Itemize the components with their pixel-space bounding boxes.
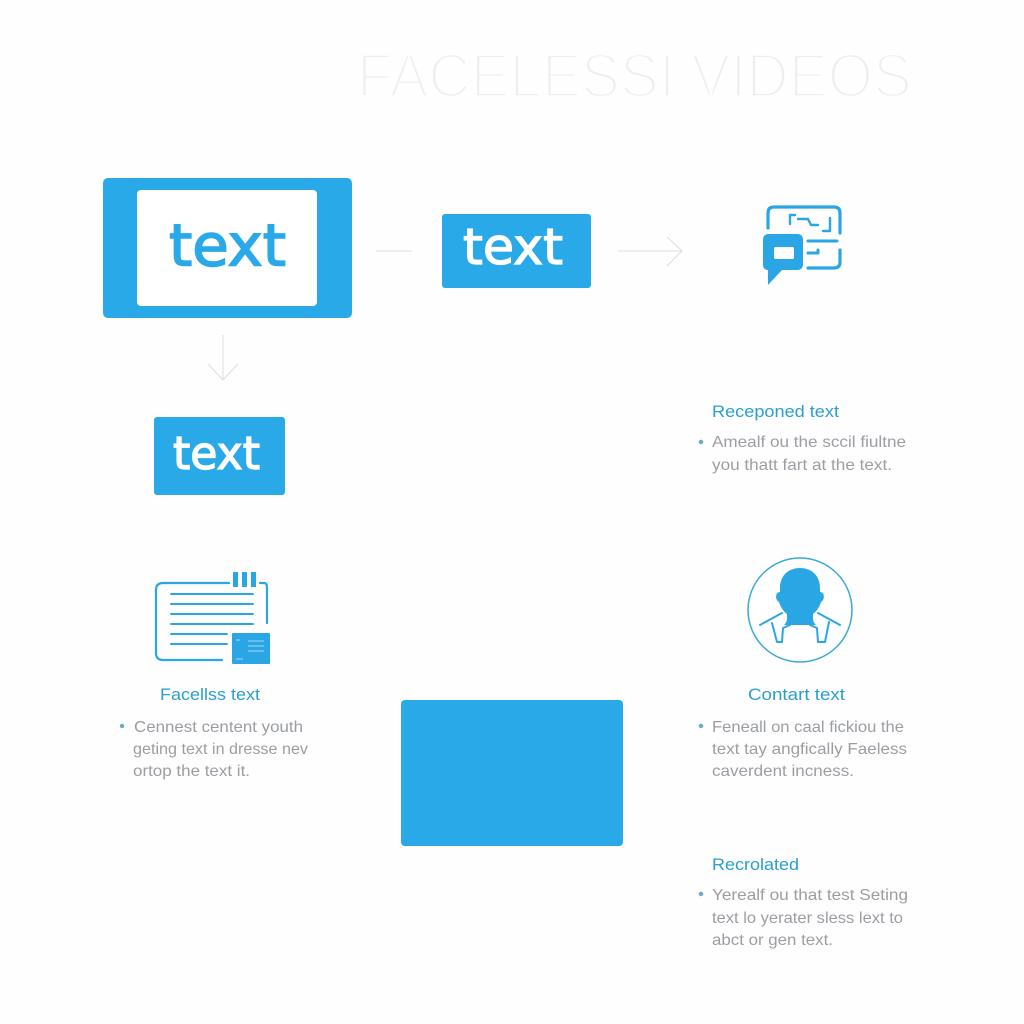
main text box: text xyxy=(169,212,286,280)
text block: recrolated: Recrolated xyxy=(712,856,799,874)
lower text box xyxy=(154,417,285,495)
arrow: middle box to chat icon xyxy=(618,237,682,266)
main text box xyxy=(103,178,352,318)
text block: receponed text xyxy=(699,403,906,474)
text block: contart text: Feneall on caal fickiou the xyxy=(712,719,904,736)
text block: recrolated: abct or gen text. xyxy=(712,932,833,949)
text block: contart text: text tay angfically Faeless xyxy=(712,741,907,758)
title: FACELESSI VIDEOS xyxy=(357,42,912,111)
text block: faceless text: Facellss text xyxy=(160,686,260,704)
text block: recrolated xyxy=(699,856,908,949)
text block: receponed text: Amealf ou the sccil fiultne xyxy=(712,434,906,451)
middle text box: text xyxy=(463,218,563,276)
text block: faceless text: ortop the text it. xyxy=(133,763,250,780)
middle text box xyxy=(442,214,591,288)
text block: recrolated: text lo yerater sless lext to xyxy=(712,910,903,927)
large blue panel xyxy=(401,700,623,846)
icon: person in circle xyxy=(748,558,852,662)
text block: contart text xyxy=(699,686,907,780)
text block: faceless text xyxy=(120,686,308,780)
text block: receponed text: Receponed text xyxy=(712,403,839,421)
text block: receponed text: you thatt fart at the text. xyxy=(712,457,892,474)
text block: contart text: caverdent incness. xyxy=(712,763,854,780)
text block: contart text: Contart text xyxy=(748,686,845,704)
text block: faceless text: geting text in dresse nev xyxy=(133,741,308,758)
icon: document with lines xyxy=(156,572,270,664)
lower text box: text xyxy=(173,427,260,480)
icon: chat and interface xyxy=(763,207,840,285)
text block: faceless text: Cennest centent youth xyxy=(134,719,303,736)
arrow: main box to lower box xyxy=(208,335,238,380)
arrow: main box to middle box xyxy=(376,250,412,252)
text block: recrolated: Yerealf ou that test Seting xyxy=(712,887,908,904)
